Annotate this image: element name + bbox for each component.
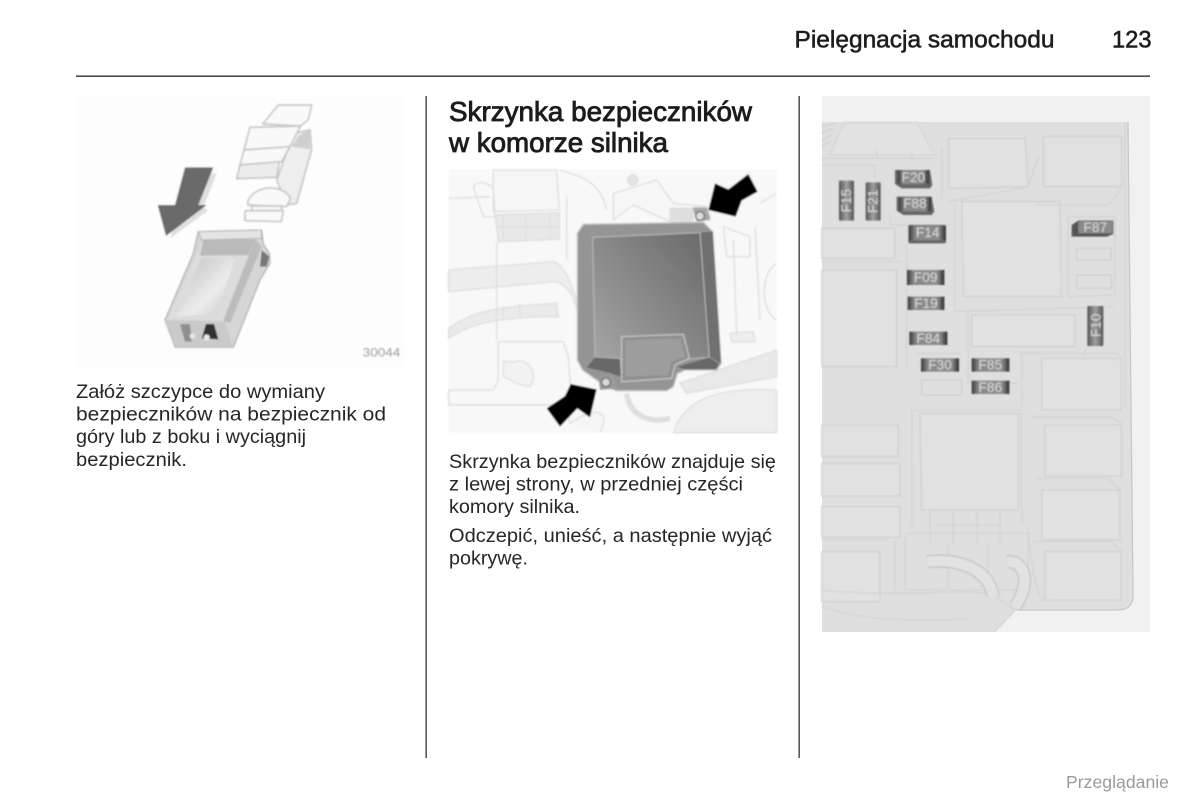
header: page number: 123 [1112,26,1152,54]
fuses [839,170,1113,395]
fuse box cover [577,207,721,391]
fuse F21: F21 [865,190,880,213]
footer: browsing label: Przeglądanie [1066,772,1169,792]
text block: fuse box location: Odczepić, unieść, a następnie wyjąć [449,525,772,547]
fuse F87 [1072,220,1113,237]
fuse F15 [839,181,854,221]
fuse F09 [907,270,944,285]
fuse F19: F19 [914,296,938,311]
text block: fuse puller instruction: góry lub z boku i wyciągnij [76,426,306,448]
text block: fuse box location [449,451,776,570]
arrow: lower left [547,384,597,427]
icon: direction arrow [158,167,217,238]
fuse box components upper [822,122,1125,410]
fuse F84: F84 [917,331,940,346]
text block: fuse box location: z lewej strony, w przedniej części [449,474,743,496]
fuse F86: F86 [979,380,1002,395]
column divider left [426,96,427,758]
fuse F20: F20 [902,170,925,185]
text block: fuse box location: Skrzynka bezpieczników znajduje się [449,451,776,473]
fuse F10: F10 [1088,313,1103,337]
header rule [76,76,1150,77]
fuse F14 [908,225,946,243]
icon: puller tool [237,105,312,222]
fuse F30: F30 [928,357,952,372]
illustration: fuse puller on fuse [76,96,404,368]
icon: fuse body [165,230,270,347]
fuse F85 [972,357,1009,372]
photo: fuse box location in engine bay [449,169,777,433]
header: section title: Pielęgnacja samochodu [794,26,1054,54]
heading: engine compartment fuse box: Skrzynka bezpieczników [449,96,753,127]
fuse F21 [865,182,881,221]
engine bay outlines [449,170,777,433]
fuse F10 [1087,306,1103,346]
fuse F30 [921,357,959,372]
fuse F86 [972,380,1009,395]
fuse F19 [908,296,944,311]
text block: fuse puller instruction: Załóż szczypce do wymiany [76,381,325,403]
image number: 30044 [363,346,401,360]
diagram: fuse box layout [822,96,1150,632]
fuse F87: F87 [1084,220,1107,235]
fuse F20 [895,170,932,188]
text block: fuse puller instruction: bezpieczników na bezpiecznik od [76,404,386,426]
arrow: upper right [708,174,758,217]
fuse F88 [897,196,934,215]
fuse F15: F15 [839,189,854,212]
fuse F88: F88 [903,196,927,211]
text block: fuse puller instruction [76,381,386,471]
fuse F09: F09 [914,270,937,285]
heading: engine compartment fuse box [448,96,753,158]
wiring [927,561,1025,607]
text block: fuse box location: komory silnika. [449,496,580,518]
heading: engine compartment fuse box: w komorze silnika [448,127,669,158]
fuse F14: F14 [916,225,940,240]
fuse F85: F85 [979,357,1002,372]
column divider right [798,96,800,758]
text block: fuse puller instruction: bezpiecznik. [76,449,187,471]
fuse F84 [909,331,947,346]
fuse box components lower [822,407,1122,632]
text block: fuse box location: pokrywę. [449,548,528,570]
